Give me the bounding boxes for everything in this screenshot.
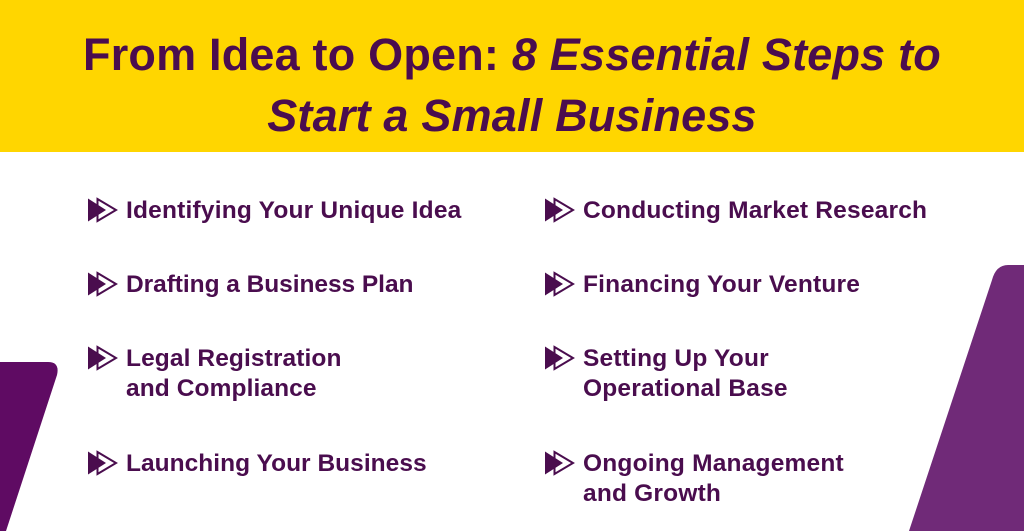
step: Identifying Your Unique Idea: Identifying Your Unique Idea <box>126 197 461 224</box>
title <box>83 29 941 140</box>
text: Operational Base <box>583 375 788 402</box>
step: Financing Your Venture: Financing Your Venture <box>583 271 860 298</box>
title banner <box>0 0 1024 152</box>
step: Ongoing Management and Growth <box>545 450 844 507</box>
step: Setting Up Your Operational Base <box>545 345 788 402</box>
step: Launching Your Business: Launching Your Business <box>126 450 427 477</box>
step: Legal Registration and Compliance: Legal Registration <box>126 345 342 372</box>
step: Setting Up Your Operational Base: Setting Up Your <box>583 345 769 372</box>
step: Legal Registration and Compliance <box>88 345 342 402</box>
text: and Growth <box>583 480 721 507</box>
title: From Idea to Open: 8 Essential Steps to <box>83 29 941 80</box>
step: Drafting a Business Plan: Drafting a Business Plan <box>126 271 413 298</box>
step: Ongoing Management and Growth: Ongoing Management <box>583 450 844 477</box>
step: Conducting Market Research: Conducting Market Research <box>583 197 927 224</box>
decorative shape: left <box>0 362 58 531</box>
title: Start a Small Business <box>267 90 757 140</box>
text: and Compliance <box>126 375 317 402</box>
